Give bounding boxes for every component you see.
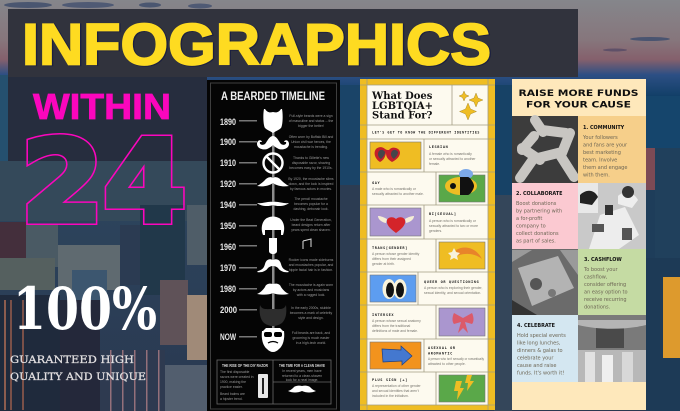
timeline years: 1940: [220, 200, 236, 211]
step 2: collaborate: company to: [516, 224, 546, 230]
step 3: cashflow: consider offering: [584, 282, 626, 288]
photo: joined hands: [512, 116, 578, 183]
timeline descriptions: In the early 2000s, stubble: [291, 306, 331, 310]
footer: rise of the razor: a hipster trend.: [220, 397, 243, 401]
footer: rise of the razor: razors were created in: [220, 375, 254, 379]
100% headline: 100%: [13, 275, 157, 343]
step 1: community: and fans are your: [583, 142, 628, 148]
timeline years: 1970: [220, 263, 236, 274]
timeline descriptions: hippie facial hair is in fashion.: [289, 268, 333, 272]
timeline footer boxes: [217, 360, 331, 404]
timeline descriptions: in a high-tech world.: [296, 341, 326, 345]
dark title band overlay: [8, 9, 578, 77]
step 4: celebrate: cause and raise: [517, 363, 556, 369]
icon: curled moustache 1900: [257, 136, 289, 149]
row: intersex: differs from the traditional: [372, 324, 410, 328]
footer: rise of the razor: The first disposable: [220, 370, 250, 374]
timeline descriptions: becomes easy by the 1910s.: [289, 166, 333, 170]
step 2: collaborate: by partnering with: [516, 208, 562, 214]
footer: clean shave: look for a neat image.: [286, 378, 318, 382]
row: plus sign: A representation of other gender: [372, 384, 422, 388]
step 1: community: best marketing: [583, 150, 621, 156]
timeline descriptions: moustache is trending.: [294, 145, 328, 149]
timeline descriptions: Union civil war heroes, the: [291, 140, 331, 144]
photo: banquet hall: [578, 315, 646, 382]
step 4: celebrate: [512, 315, 578, 382]
row: intersex: INTERSEX: [372, 313, 394, 317]
yellow panel heading: [371, 91, 433, 122]
row: gay: A male who is romantically or: [372, 187, 417, 191]
step 4: celebrate: like long lunches,: [517, 340, 561, 346]
panel: raise more funds for your cause: [512, 79, 646, 410]
timeline years: 1950: [220, 221, 236, 232]
funds heading: FOR YOUR CAUSE: [526, 100, 631, 110]
footer: rise of the razor: practice easier.: [220, 385, 243, 389]
row: queer or questioning: sexual identity, and sexual orientation.: [424, 291, 481, 295]
funds heading: [518, 88, 638, 110]
tagline: QUALITY AND UNIQUE: [10, 371, 146, 383]
row: intersex: [372, 308, 485, 336]
title: INFOGRAPHICS: INFOGRAPHICS: [22, 12, 491, 78]
row: lesbian: LESBIAN: [429, 145, 448, 149]
icon: chevron moustache 1980: [257, 284, 289, 295]
funds heading: RAISE MORE FUNDS: [518, 88, 638, 99]
timeline descriptions: The moustache is again worn: [289, 283, 333, 287]
row: trans: [372, 242, 485, 269]
panel: a bearded timeline: [207, 80, 340, 411]
row: asexual or aromantic: A person who isn't sexually or romantically: [428, 357, 484, 361]
footer: clean shave: THE TIME FOR A CLEAN SHAVE: [279, 363, 325, 368]
row: bisexual: [370, 208, 478, 236]
step 4: celebrate: 4. CELEBRATE: [517, 323, 555, 329]
icon: hair and glasses 1950: [262, 216, 284, 235]
footer: clean shave: In recent years, men have: [282, 369, 322, 373]
yellow panel heading: What Does: [371, 91, 433, 102]
step 1: community: 1. COMMUNITY: [583, 125, 625, 131]
row: bisexual: A person who is romantically or: [429, 219, 477, 223]
row: queer or questioning: [370, 275, 483, 302]
dark left overlay: [8, 77, 207, 161]
timeline years: 1920: [220, 179, 236, 190]
step 3: cashflow: cashflow,: [584, 274, 608, 280]
row: lesbian: or sexually attracted to another: [429, 157, 476, 161]
icon: stubble beard 2000: [260, 305, 286, 326]
row: queer or questioning: A person who is exploring their gender,: [424, 286, 483, 290]
timeline descriptions: beard designs return after: [292, 223, 331, 227]
row: gay: [372, 169, 485, 202]
timeline descriptions: by actors and musicians: [293, 288, 329, 292]
timeline descriptions: of masculine and status -- the: [289, 119, 333, 123]
icon: moustache 1920: [257, 177, 289, 186]
row: plus sign: included in the initialism.: [372, 394, 409, 398]
row: lesbian: A female who is romantically: [429, 152, 472, 156]
timeline descriptions: grooming is much easier: [293, 336, 330, 340]
timeline descriptions: Full-style beards were a sign: [289, 114, 333, 118]
step 4: celebrate: funds. It's worth it!: [517, 370, 564, 376]
timeline descriptions: with a rugged look.: [297, 293, 325, 297]
row: lesbian: [370, 142, 476, 169]
timeline heading: A BEARDED TIMELINE: [221, 89, 325, 103]
timeline years: NOW: [220, 332, 236, 343]
subheading: LET'S GET TO KNOW THE DIFFERENT IDENTITIES: [372, 130, 480, 134]
timeline descriptions: bigger the better!: [298, 124, 324, 128]
footer: rise of the razor: THE RISE OF THE DIY RAZOR: [222, 363, 268, 368]
timeline years: 1900: [220, 137, 236, 148]
icon: prohibition sign 1910: [264, 154, 282, 172]
footer: rise of the razor: 1900, making the: [220, 380, 246, 384]
step 4: celebrate: dinners & galas to: [517, 348, 563, 354]
timeline descriptions: style and design.: [298, 316, 324, 320]
timeline years: 1960: [220, 242, 236, 253]
row: asexual or aromantic: AROMANTIC: [428, 352, 453, 356]
icon: modern beard and sunglasses: [262, 328, 284, 352]
step 1: community: them and engage: [583, 165, 627, 171]
row: bisexual: BI[SEXUAL]: [429, 212, 457, 216]
step 4: celebrate: celebrate your: [517, 356, 554, 362]
footer: rise of the razor: Beard balms are: [220, 392, 245, 396]
step 2: collaborate: as part of sales.: [516, 238, 556, 244]
row: trans: differs from their assigned: [372, 257, 411, 261]
row: bisexual: genders.: [429, 229, 442, 233]
row: bisexual: sexually attracted to two or more: [429, 224, 478, 228]
step 2: collaborate: [512, 183, 578, 249]
row: plus sign: [372, 375, 485, 402]
timeline descriptions: Under the Beat Generation,: [290, 218, 332, 222]
timeline descriptions: disposable razor, shaving: [292, 161, 330, 165]
timeline descriptions: by famous actors in movies.: [290, 187, 332, 191]
row: trans: gender at birth.: [372, 262, 395, 266]
tagline: [10, 354, 146, 383]
year connectors: [239, 120, 257, 338]
heading: WITHIN: WITHIN: [33, 86, 171, 127]
step 3: cashflow: To boost your: [583, 267, 618, 273]
step 4: celebrate: Hold special events: [517, 333, 566, 339]
footer: rise of the razor: [220, 363, 268, 401]
timeline descriptions: and moustaches popular, and: [289, 263, 333, 267]
timeline descriptions: dashing, debonair look.: [293, 207, 329, 211]
timeline descriptions: The pencil moustache: [294, 197, 328, 201]
row: queer or questioning: QUEER OR QUESTIONING: [424, 280, 479, 284]
step 1: community: with them.: [583, 172, 610, 178]
icon: handlebar moustache 1970: [257, 259, 289, 272]
timeline axis: [272, 115, 274, 330]
timeline descriptions: Often worn by Buffalo Bill and: [289, 135, 333, 139]
timeline years: 2000: [220, 305, 237, 316]
photo: dollar bills: [512, 249, 578, 315]
timeline years: [220, 117, 237, 343]
icon: sparkles: [459, 91, 483, 120]
row: lesbian: female.: [429, 162, 440, 166]
timeline years: 1910: [220, 158, 236, 169]
row: asexual or aromantic: ASEXUAL OR: [428, 346, 456, 350]
row: plus sign: and sexual identities that aren't: [372, 389, 419, 393]
timeline descriptions: [288, 114, 334, 345]
icon: music notes 1960: [303, 239, 311, 249]
timeline descriptions: Rocker icons made sideburns: [289, 258, 334, 262]
timeline descriptions: years spent clean shaven.: [291, 228, 331, 232]
row: intersex: A person whose sexual anatomy: [372, 319, 421, 323]
footer: clean shave: returned to a clean-shaven: [282, 374, 322, 378]
row: trans: TRANS[GENDER]: [372, 246, 408, 250]
icon: full beard 1890: [263, 109, 283, 133]
timeline descriptions: becomes popular for a: [294, 202, 328, 206]
step 1: community: team. Involve: [583, 158, 617, 164]
timeline descriptions: Thanks to Gillette's new: [293, 156, 329, 160]
footer: clean shave: [279, 363, 325, 392]
timeline descriptions: becomes a mark of celebrity: [290, 311, 333, 315]
timeline descriptions: down, and the look is inspired: [289, 182, 333, 186]
title: INFOGRAPHICS: INFOGRAPHICS: [23, 13, 492, 78]
step 3: cashflow: [578, 249, 646, 315]
yellow panel heading: LGBTQIA+: [372, 101, 433, 112]
step 3: cashflow: donations.: [584, 304, 611, 310]
step 3: cashflow: receive recurring: [584, 297, 627, 303]
step 3: cashflow: 3. CASHFLOW: [584, 257, 622, 263]
tagline: GUARANTEED HIGH: [10, 354, 134, 366]
step 2: collaborate: Boost donations: [516, 201, 557, 207]
step 2: collaborate: collect donations: [516, 231, 559, 237]
timeline years: 1980: [220, 284, 236, 295]
icon: thin moustache 1940: [257, 202, 289, 206]
panel: what does LGBTQIA+ stand for: [360, 79, 495, 410]
row: intersex: definitions of male and female.: [372, 329, 418, 333]
row: asexual or aromantic: [370, 342, 484, 369]
row: plus sign: PLUS SIGN [+]: [372, 378, 408, 382]
step 2: collaborate: 2. COLLABORATE: [516, 191, 562, 197]
step 1: community: Your followers: [582, 135, 618, 141]
yellow panel heading: Stand For?: [372, 110, 433, 122]
step 2: collaborate: a for-profit: [516, 216, 542, 222]
orange block at right edge: [663, 277, 680, 358]
row: gay: sexually attracted to another male.: [372, 192, 424, 196]
timeline descriptions: By 1920, the moustache slims: [288, 177, 334, 181]
icon: goatee 1960: [269, 238, 277, 254]
row: asexual or aromantic: attracted to other people.: [428, 362, 466, 366]
photo: team at table: [578, 183, 646, 249]
outlined number 24: 24: [21, 116, 186, 248]
step 1: community: [578, 116, 646, 183]
step 3: cashflow: an easy option to: [584, 290, 628, 296]
row: trans: A person whose gender identity: [372, 252, 420, 256]
row: gay: GAY: [372, 181, 381, 185]
timeline years: 1890: [220, 117, 236, 128]
timeline descriptions: Full beards are back, and: [292, 331, 330, 335]
